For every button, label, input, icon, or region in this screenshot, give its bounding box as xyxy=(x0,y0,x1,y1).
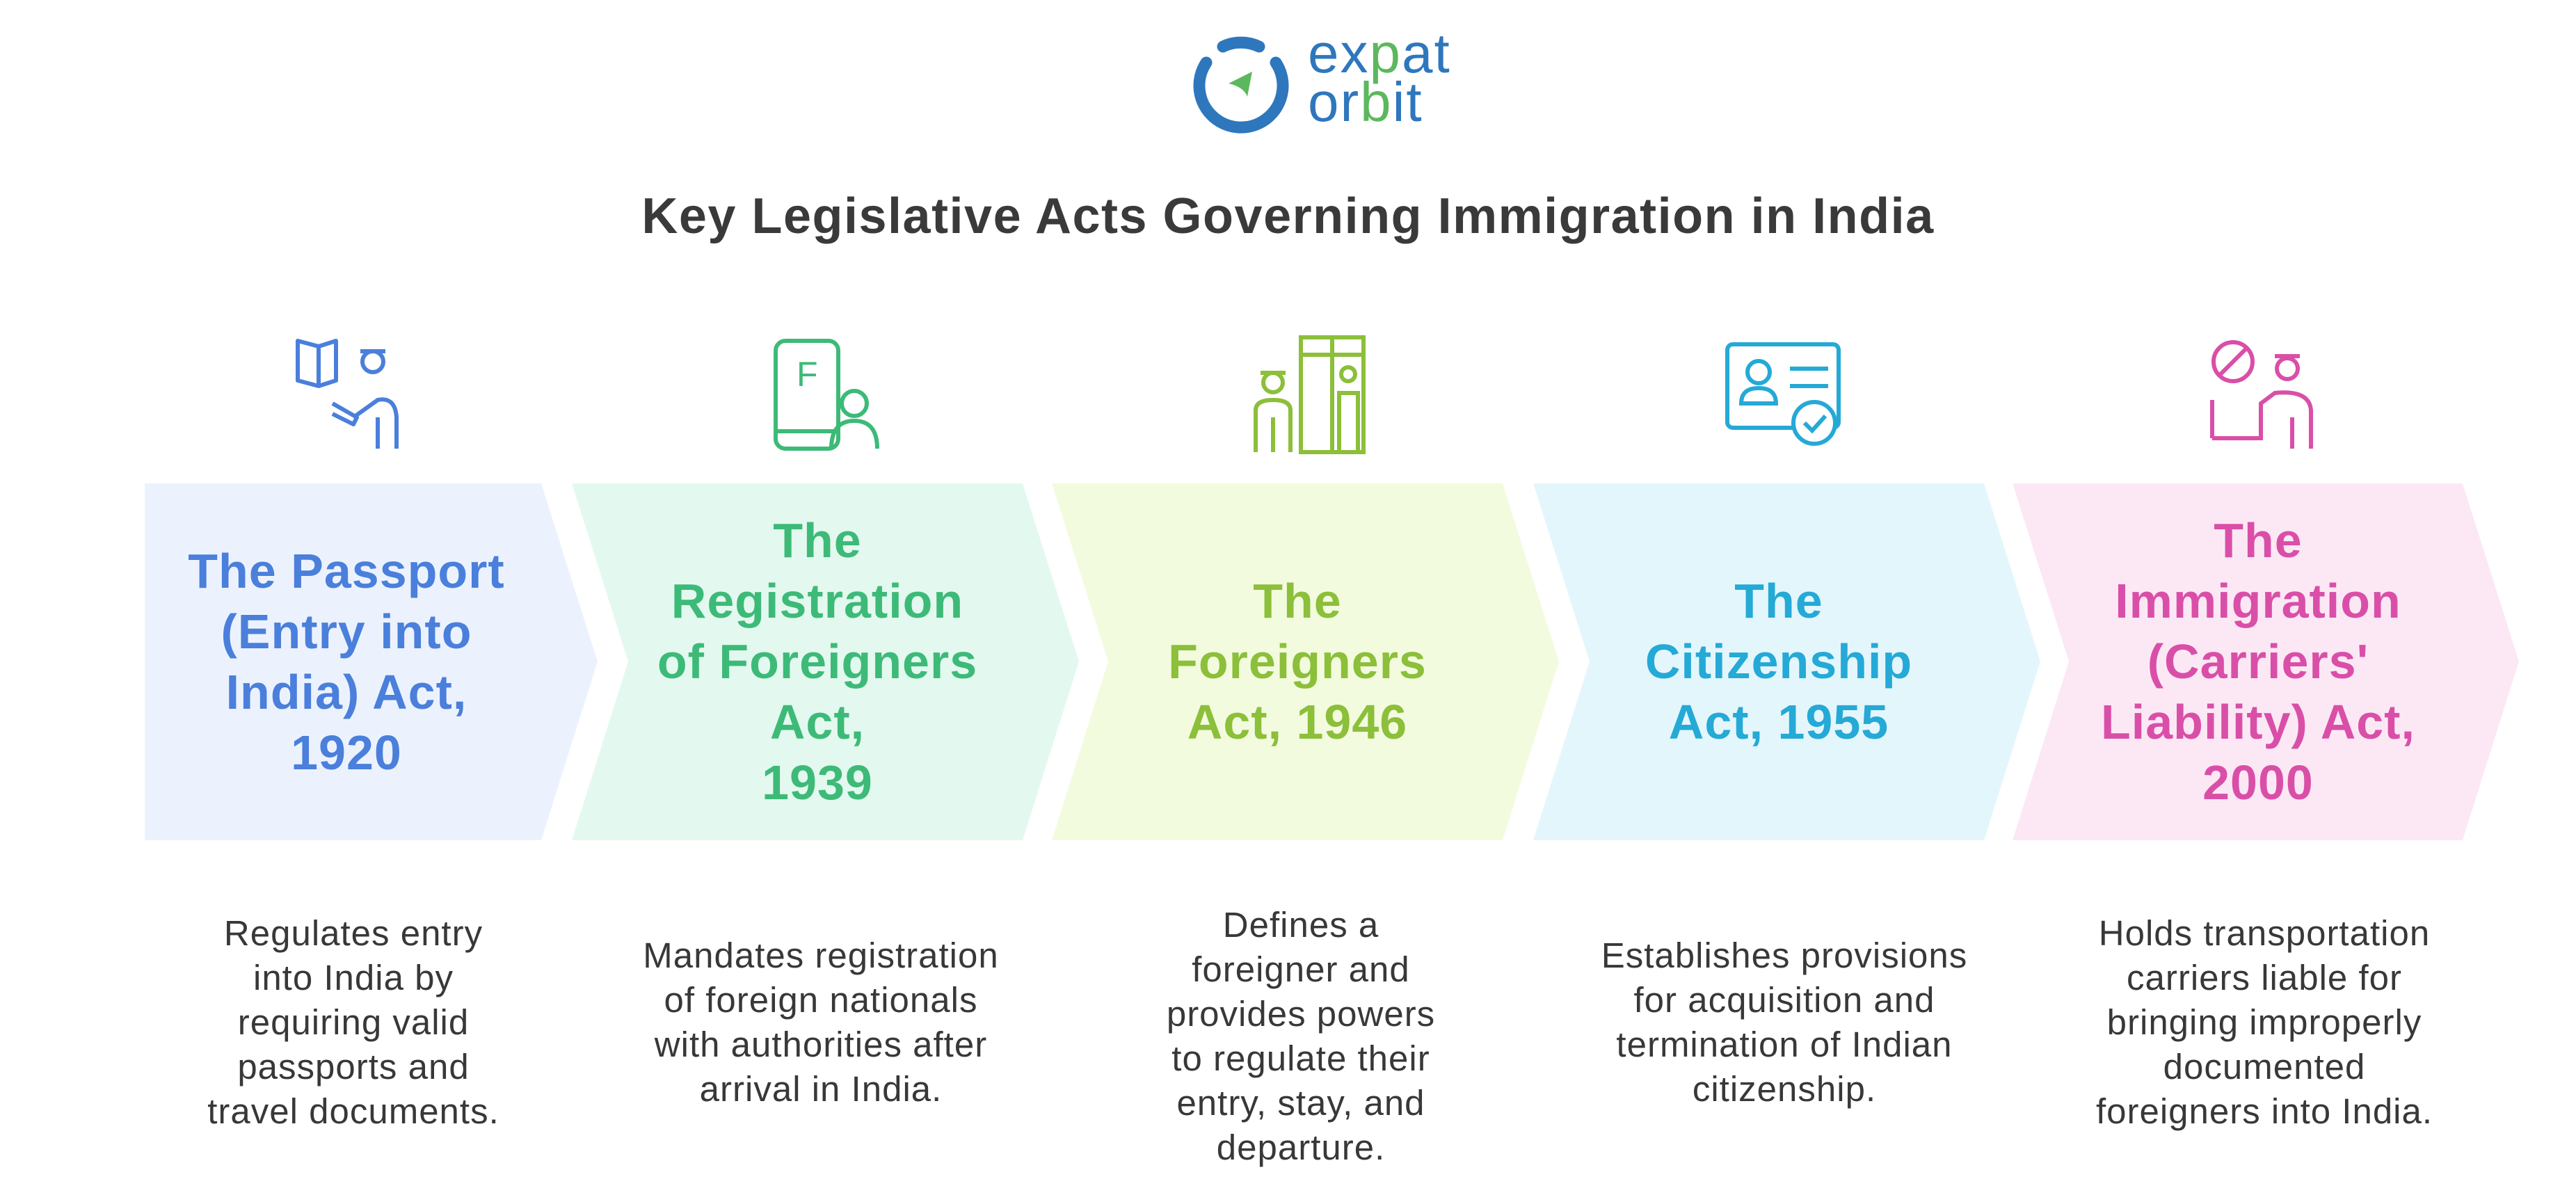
heading 4: Citizenship xyxy=(1645,634,1912,689)
description 3: provides powers xyxy=(1167,994,1435,1034)
description 5: carriers liable for xyxy=(2127,958,2402,997)
chevron 4 xyxy=(1533,483,2040,840)
icon: passport officer xyxy=(296,339,399,449)
heading 3: The xyxy=(1253,574,1342,628)
description 2: arrival in India. xyxy=(700,1069,942,1109)
heading 2: Act, xyxy=(770,695,865,749)
description 3: entry, stay, and xyxy=(1176,1083,1425,1123)
description 2: with authorities after xyxy=(655,1025,987,1064)
icon: carrier liability xyxy=(2210,340,2313,449)
heading 3: Foreigners xyxy=(1168,634,1427,689)
description 3 xyxy=(1167,905,1435,1167)
description 2 xyxy=(643,936,999,1109)
heading 1: India) Act, xyxy=(226,665,467,719)
description 5: bringing improperly xyxy=(2107,1002,2422,1042)
description 1: Regulates entry xyxy=(224,913,483,953)
heading 2: Registration xyxy=(671,574,963,628)
heading 3: Act, 1946 xyxy=(1187,695,1407,749)
description 5: Holds transportation xyxy=(2099,913,2430,953)
chevron 3 xyxy=(1052,483,1559,840)
heading 1: 1920 xyxy=(291,725,402,779)
heading 4: Act, 1955 xyxy=(1669,695,1889,749)
description 3: foreigner and xyxy=(1192,949,1410,989)
logo text xyxy=(1308,22,1451,133)
description 2: Mandates registration xyxy=(643,936,999,975)
heading 3 xyxy=(1168,574,1427,749)
heading 5: Liability) Act, xyxy=(2101,695,2415,749)
description 3: Defines a xyxy=(1223,905,1379,945)
icon: citizenship card xyxy=(1725,342,1841,446)
description 5: foreigners into India. xyxy=(2096,1091,2433,1131)
description 1 xyxy=(207,913,499,1131)
description 1: travel documents. xyxy=(207,1091,499,1131)
icon: orbit ring xyxy=(1199,42,1283,127)
heading 1: (Entry into xyxy=(221,604,472,658)
description 4: termination of Indian xyxy=(1616,1025,1953,1064)
logo text: expat xyxy=(1308,22,1451,84)
heading 4: The xyxy=(1734,574,1823,628)
chevron 2 xyxy=(572,483,1079,840)
description 1: passports and xyxy=(237,1047,470,1086)
heading 2: 1939 xyxy=(762,755,873,810)
heading 1 xyxy=(188,544,505,779)
heading 2: of Foreigners xyxy=(657,634,977,689)
description 3: to regulate their xyxy=(1171,1038,1430,1078)
heading 1: The Passport xyxy=(188,544,505,598)
chevron 5 xyxy=(2013,483,2519,840)
description 4: for acquisition and xyxy=(1634,980,1935,1020)
logo text: orbit xyxy=(1308,71,1423,133)
heading 5 xyxy=(2101,513,2415,810)
description 1: requiring valid xyxy=(238,1002,469,1042)
heading 2: The xyxy=(773,513,862,568)
description 5 xyxy=(2096,913,2433,1131)
description 4: citizenship. xyxy=(1693,1069,1876,1109)
description 5: documented xyxy=(2163,1047,2365,1086)
heading 5: Immigration xyxy=(2115,574,2401,628)
description 4 xyxy=(1601,936,1967,1109)
description 4: Establishes provisions xyxy=(1601,936,1967,975)
title: Key Legislative Acts Governing Immigration in India xyxy=(641,189,1935,244)
heading 4 xyxy=(1645,574,1912,749)
description 1: into India by xyxy=(253,958,454,997)
heading 5: 2000 xyxy=(2202,755,2314,810)
heading 5: The xyxy=(2214,513,2303,568)
description 2: of foreign nationals xyxy=(664,980,977,1020)
description 3: departure. xyxy=(1217,1128,1385,1167)
heading 2 xyxy=(657,513,977,810)
logo xyxy=(1194,22,1451,134)
heading 5: (Carriers' xyxy=(2147,634,2369,689)
icon: border gate xyxy=(1254,335,1366,454)
chevron 1 xyxy=(145,483,598,840)
icon: registration xyxy=(774,339,879,451)
icon: registration: F xyxy=(797,355,818,394)
